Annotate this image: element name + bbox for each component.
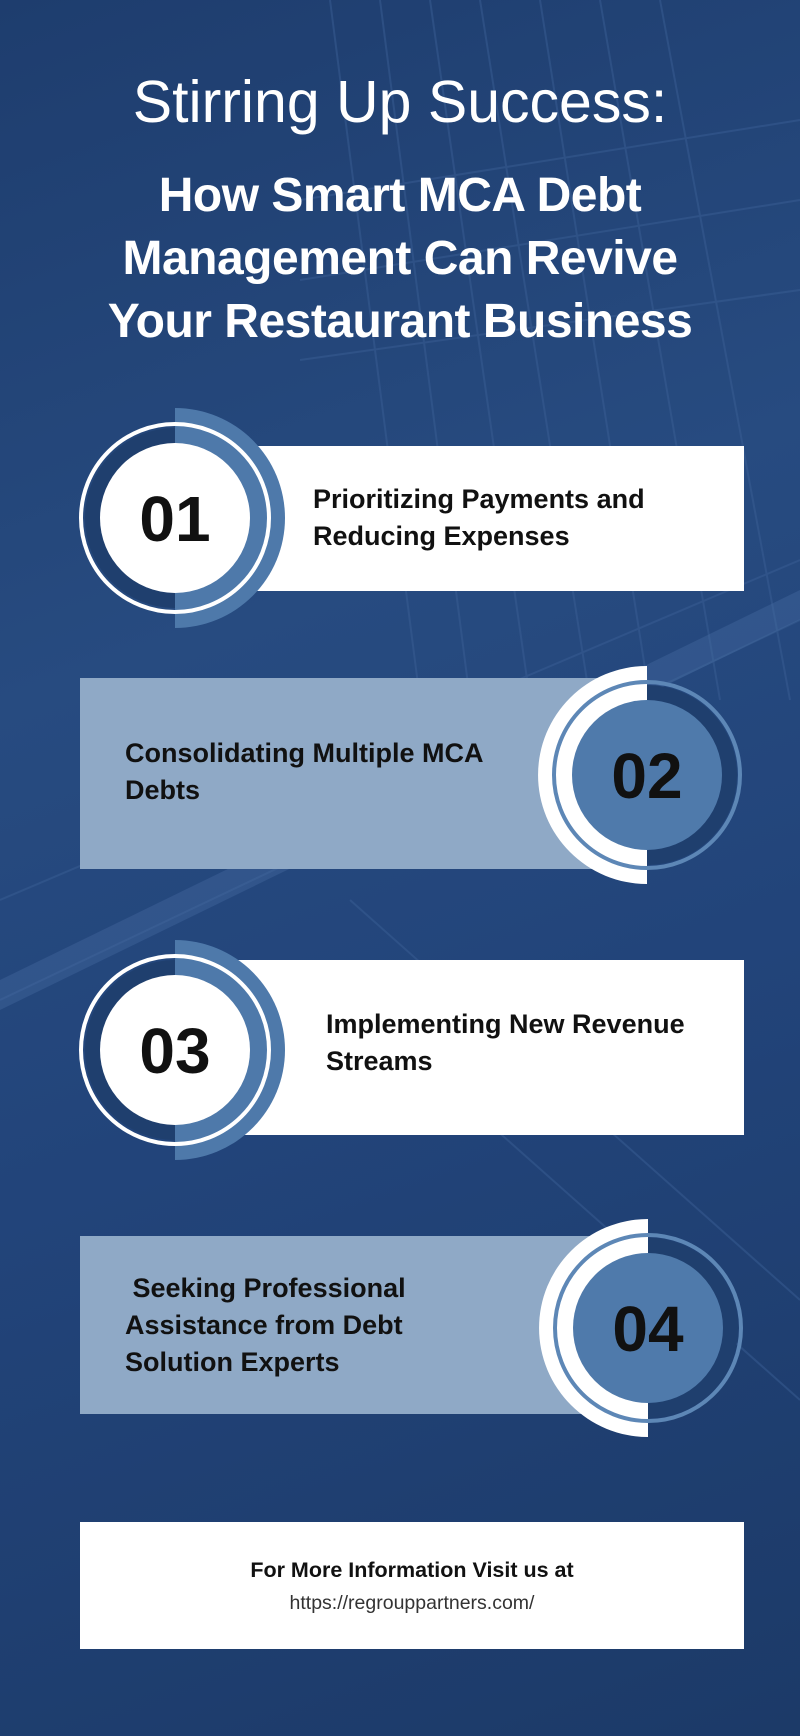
text 01: Reducing Expenses (313, 521, 570, 551)
title: Stirring Up Success: (133, 69, 667, 135)
footer heading: For More Information Visit us at (250, 1558, 574, 1582)
icon: circle 02 (538, 666, 742, 884)
subtitle: Management Can Revive (122, 232, 678, 285)
icon: circle 02: 02 (611, 740, 683, 812)
subtitle (108, 169, 692, 348)
text 03: Streams (326, 1046, 433, 1076)
text 01: Prioritizing Payments and (313, 484, 645, 514)
text 03 (326, 1009, 685, 1076)
icon: circle 04: 04 (612, 1293, 684, 1365)
card 03 (238, 960, 744, 1135)
text 04: Assistance from Debt (125, 1310, 403, 1340)
card 02 (80, 678, 647, 869)
panel: step 04 (80, 1219, 743, 1437)
card 04 (80, 1236, 647, 1414)
panel: step 01 (79, 408, 744, 628)
panel: step 03 (79, 940, 744, 1160)
icon: circle 03 (79, 940, 285, 1160)
text 02: Consolidating Multiple MCA (125, 738, 483, 768)
card 01 (238, 446, 744, 591)
text 04: Solution Experts (125, 1347, 340, 1377)
panel: step 02 (80, 666, 742, 884)
text 01 (313, 484, 645, 551)
icon: circle 01: 01 (139, 483, 211, 555)
icon: circle 01 (79, 408, 285, 628)
icon: circle 04 (539, 1219, 743, 1437)
text 02: Debts (125, 775, 200, 805)
footer url: https://regrouppartners.com/ (290, 1592, 534, 1614)
subtitle: How Smart MCA Debt (159, 169, 641, 222)
text 04: Seeking Professional (132, 1273, 406, 1303)
text 02 (125, 738, 483, 805)
icon: circle 03: 03 (139, 1015, 211, 1087)
footer box (80, 1522, 744, 1649)
text 03: Implementing New Revenue (326, 1009, 685, 1039)
text 04 (125, 1273, 406, 1377)
subtitle: Your Restaurant Business (108, 295, 692, 348)
